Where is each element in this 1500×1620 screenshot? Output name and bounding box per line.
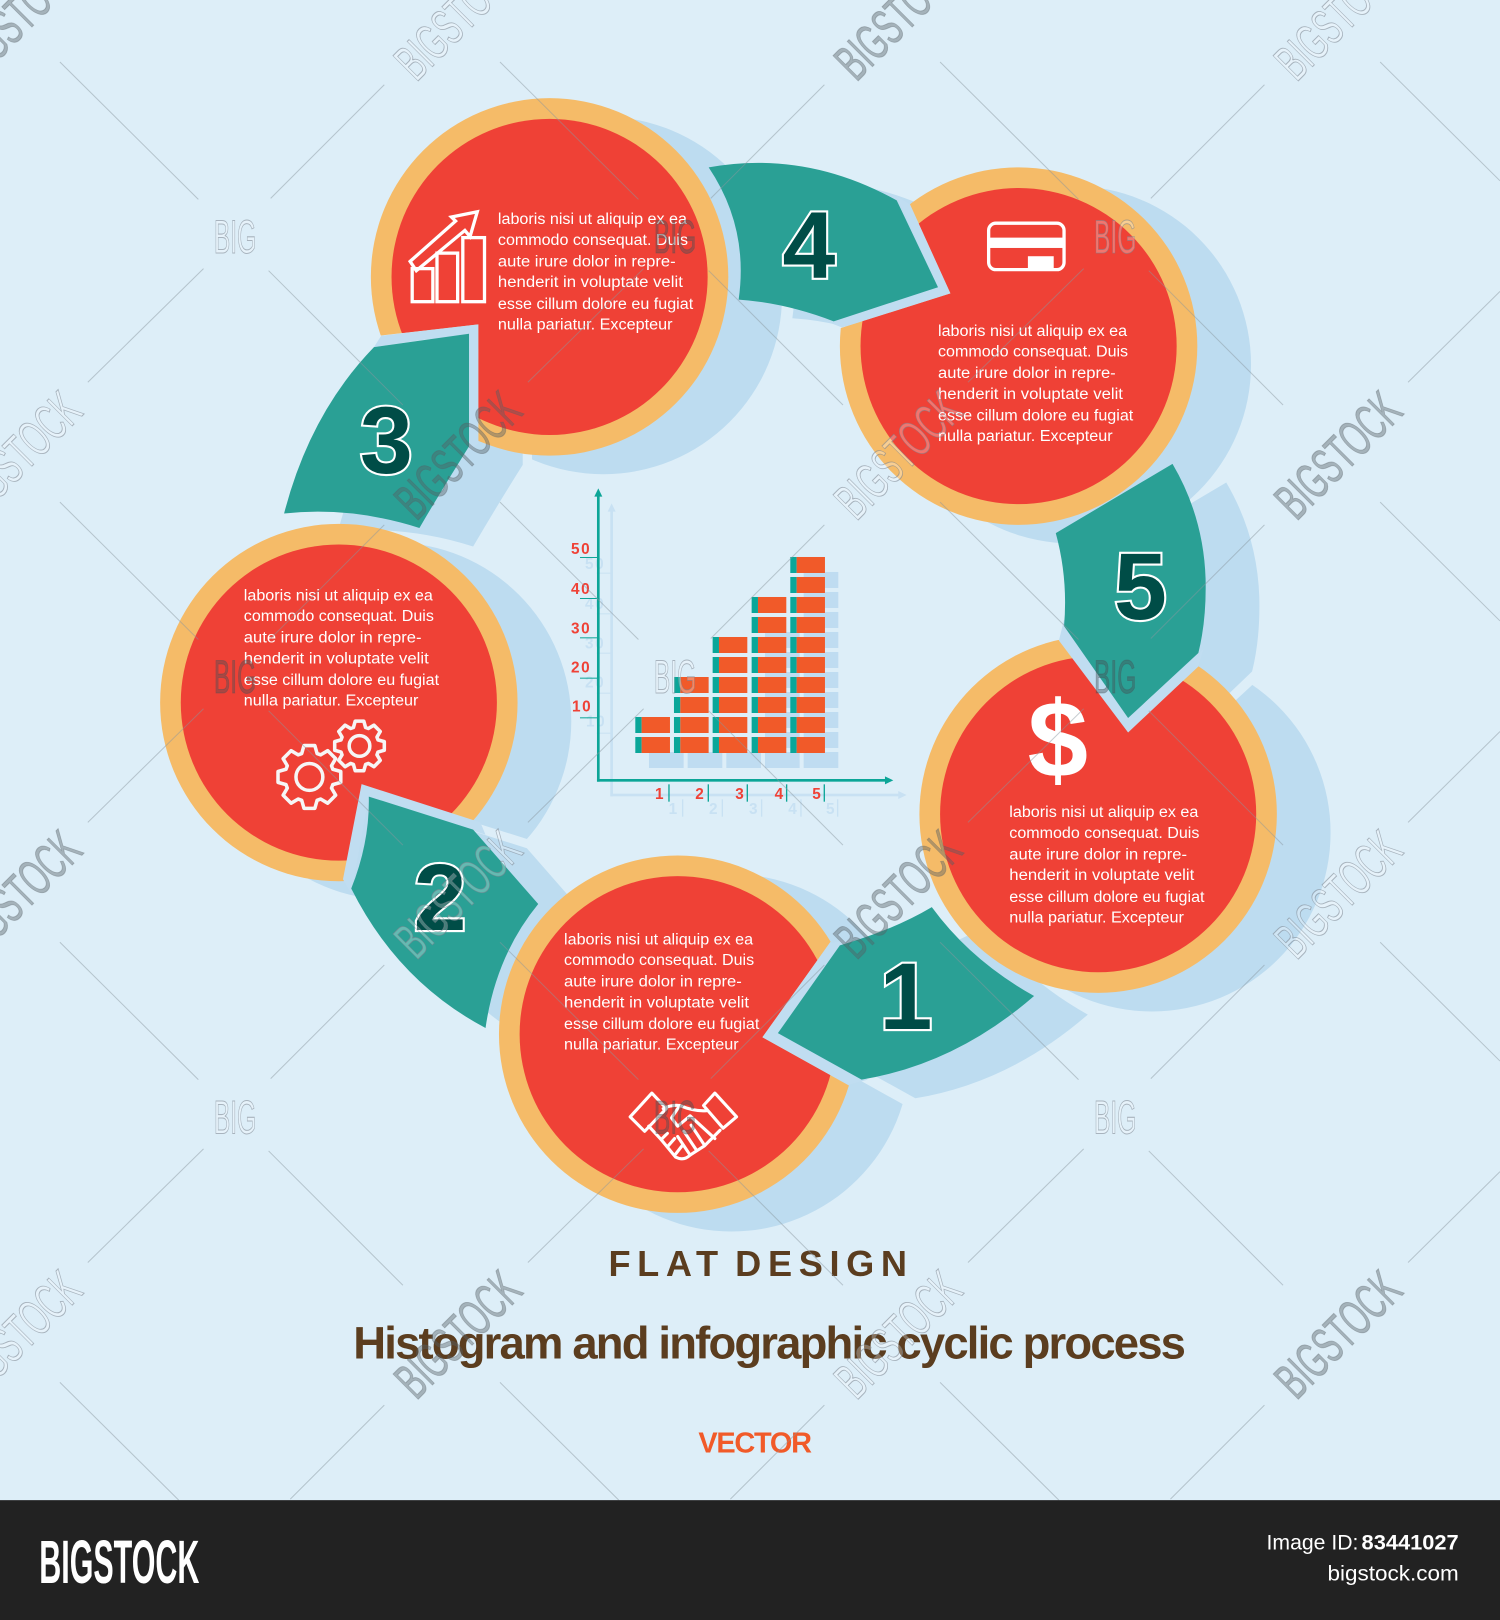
x axis labels: 3 <box>735 786 746 803</box>
x axis labels: 1 <box>655 786 665 803</box>
y axis labels <box>571 541 592 715</box>
text block: step 3 <box>498 211 694 334</box>
x axis labels: 4 <box>775 786 785 803</box>
chart shadow: 30 <box>585 635 605 652</box>
watermarks: BIG: BIG <box>1094 211 1136 264</box>
arrow 1: 1 <box>880 944 932 1050</box>
chart shadow: 40 <box>585 596 605 613</box>
text block: step 1: laboris nisi ut aliquip ex ea <box>564 931 753 948</box>
text block: step 4: esse cillum dolore eu fugiat <box>938 407 1134 424</box>
text block: step 3: nulla pariatur. Excepteur <box>498 317 673 334</box>
icon: gears <box>278 721 384 808</box>
watermarks: BIGSTOCK: BIGSTOCK <box>823 1260 972 1409</box>
icon: handshake <box>630 1093 737 1159</box>
icon: credit card <box>989 223 1064 270</box>
text block: step 5: aute irure dolor in repre- <box>1009 847 1187 864</box>
panel: step 2 circle <box>160 524 518 881</box>
arrow 5 <box>1056 464 1206 718</box>
watermarks: BIG: BIG <box>1094 651 1136 704</box>
text block: step 4: nulla pariatur. Excepteur <box>938 428 1113 445</box>
histogram bars <box>635 557 825 753</box>
text block: step 3: esse cillum dolore eu fugiat <box>498 296 694 313</box>
arrow 4: 4 <box>782 193 835 299</box>
arrow 4 <box>709 163 938 321</box>
watermarks: BIGSTOCK: BIGSTOCK <box>383 819 532 969</box>
text block: step 1: commodo consequat. Duis <box>564 952 754 969</box>
text block: step 2: esse cillum dolore eu fugiat <box>244 672 440 689</box>
text block: step 3: henderit in voluptate velit <box>498 274 683 291</box>
watermarks: BIGSTOCK: BIGSTOCK <box>383 380 532 530</box>
watermarks: BIG: BIG <box>654 651 696 704</box>
icon: dollar sign: $ <box>1028 679 1088 800</box>
text block: step 5: laboris nisi ut aliquip ex ea <box>1009 804 1198 821</box>
text block: step 1: henderit in voluptate velit <box>564 994 750 1011</box>
chart shadow: 5 <box>826 801 836 818</box>
text block: step 1: esse cillum dolore eu fugiat <box>564 1016 760 1033</box>
watermarks: BIG <box>214 211 1136 1144</box>
title: Histogram and infographic cyclic process <box>353 1318 1186 1369</box>
chart shadow: 1 <box>669 801 679 818</box>
chart shadow: 3 <box>749 801 759 818</box>
text block: step 1: nulla pariatur. Excepteur <box>564 1037 739 1054</box>
watermarks: BIG: BIG <box>1094 1091 1136 1144</box>
arrow outline strips <box>343 196 1204 1085</box>
text block: step 2: nulla pariatur. Excepteur <box>244 693 419 710</box>
panel: step 5 circle <box>919 635 1277 993</box>
text block: step 2: commodo consequat. Duis <box>244 608 434 625</box>
y axis labels: 20 <box>571 660 591 677</box>
chart shadow: 20 <box>585 675 605 692</box>
watermarks: BIGSTOCK: BIGSTOCK <box>383 1260 532 1409</box>
panel: step 1 circle <box>499 855 856 1213</box>
arrow 3: 3 <box>360 388 413 494</box>
drop shadows of circles and arrows <box>214 117 1331 1232</box>
text block: step 2: laboris nisi ut aliquip ex ea <box>244 587 433 604</box>
footer bar <box>0 1500 1500 1620</box>
x axis labels <box>655 786 823 803</box>
text block: step 4: commodo consequat. Duis <box>938 343 1128 360</box>
text block: step 3: commodo consequat. Duis <box>498 232 688 249</box>
text block: step 4: aute irure dolor in repre- <box>938 365 1116 382</box>
y axis labels: 30 <box>571 620 591 637</box>
histogram chart <box>571 488 907 818</box>
y axis labels: 40 <box>571 581 591 598</box>
text block: step 4: henderit in voluptate velit <box>938 386 1124 403</box>
text block: step 2: henderit in voluptate velit <box>244 650 429 667</box>
chart shadow: 10 <box>586 713 606 730</box>
heading: flat design: FLAT DESIGN <box>608 1243 907 1284</box>
watermarks: BIGSTOCK: BIGSTOCK <box>823 380 972 530</box>
y axis labels: 50 <box>571 541 591 558</box>
text block: step 5: henderit in voluptate velit <box>1009 867 1195 884</box>
chart shadow: 4 <box>788 801 799 818</box>
footer image id: Image ID: <box>1267 1530 1358 1555</box>
y axis labels: 10 <box>572 698 592 715</box>
text block: step 1: aute irure dolor in repre- <box>564 974 742 991</box>
chart shadow: 50 <box>585 556 605 573</box>
arrow 2 <box>351 797 538 1028</box>
chart shadow <box>585 503 907 818</box>
watermarks: BIGSTOCK: BIGSTOCK <box>1263 380 1412 530</box>
text block: step 4: laboris nisi ut aliquip ex ea <box>938 323 1127 340</box>
arrow 1 <box>778 907 1034 1080</box>
text block: step 2 <box>244 587 440 710</box>
text block: step 5: esse cillum dolore eu fugiat <box>1009 889 1205 906</box>
footer bar: BIGSTOCK <box>39 1528 199 1596</box>
footer image number: 83441027 <box>1362 1530 1459 1555</box>
text block: step 5: nulla pariatur. Excepteur <box>1009 910 1185 927</box>
chart shadow: 2 <box>709 801 719 818</box>
panel: step 4 circle <box>840 167 1197 525</box>
arrow 5: 5 <box>1114 534 1167 640</box>
icon: rising bar chart <box>410 212 485 302</box>
watermarks: BIG: BIG <box>654 1091 696 1144</box>
watermarks: BIGSTOCK: BIGSTOCK <box>1263 819 1412 969</box>
x axis labels: 2 <box>695 786 706 803</box>
chart axes <box>580 488 893 802</box>
text block: step 2: aute irure dolor in repre- <box>244 630 421 647</box>
text block: step 5: commodo consequat. Duis <box>1009 825 1199 842</box>
arrow 3 <box>284 334 469 528</box>
x axis labels: 5 <box>812 786 823 803</box>
panel: step 3 circle <box>371 98 728 456</box>
text block: step 3: aute irure dolor in repre- <box>498 254 676 271</box>
subtitle: vector: VECTOR <box>698 1428 812 1460</box>
text block: step 3: laboris nisi ut aliquip ex ea <box>498 211 687 228</box>
arrow 2: 2 <box>414 845 467 951</box>
watermarks: BIG: BIG <box>214 211 256 264</box>
watermarks: BIG: BIG <box>654 211 696 264</box>
watermarks: BIGSTOCK: BIGSTOCK <box>823 819 972 969</box>
text block: step 5 <box>1009 804 1205 927</box>
footer site: bigstock.com <box>1327 1561 1459 1586</box>
text block: step 1 <box>564 931 760 1054</box>
text block: step 4 <box>938 323 1134 445</box>
watermarks: BIGSTOCK: BIGSTOCK <box>1263 1260 1412 1409</box>
watermarks: BIG: BIG <box>214 651 256 704</box>
watermarks: BIG: BIG <box>214 1091 256 1144</box>
